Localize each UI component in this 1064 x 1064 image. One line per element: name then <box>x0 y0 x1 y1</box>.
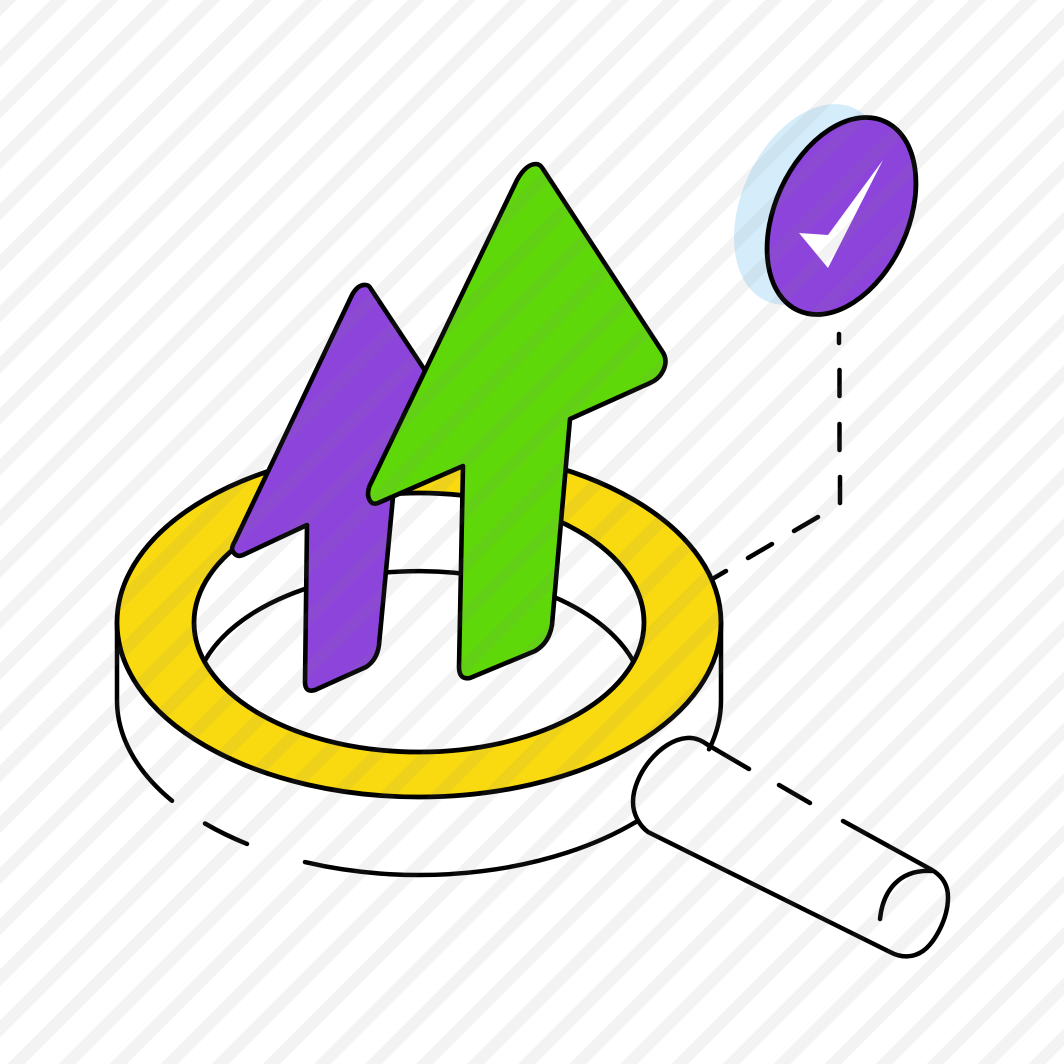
magnifier handle <box>633 738 948 956</box>
magnifier lens depth <box>117 571 721 875</box>
badge disc <box>738 94 945 338</box>
purple arrow <box>232 285 430 691</box>
badge shadow <box>704 80 916 329</box>
green arrow <box>368 164 666 678</box>
check mark <box>799 160 883 268</box>
icon: check badge <box>704 80 945 338</box>
dashed connector from badge to magnifier <box>714 334 840 578</box>
magnifier ring <box>117 448 721 797</box>
